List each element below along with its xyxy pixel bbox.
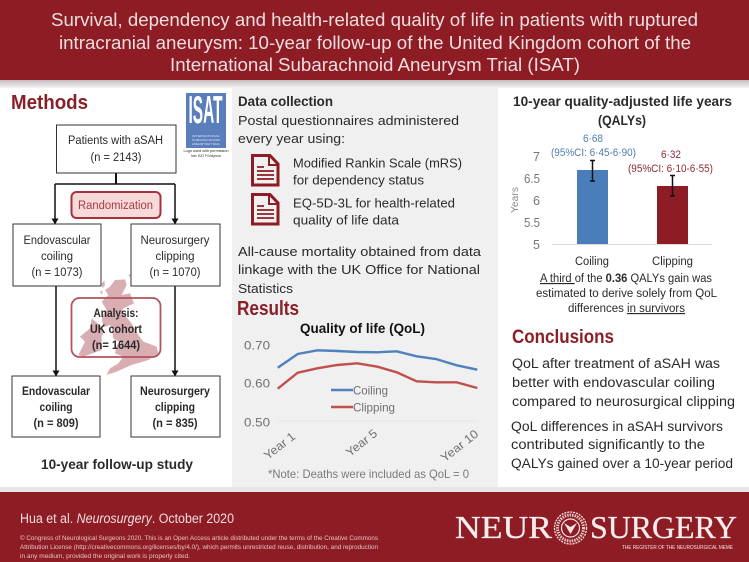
- y axis: 5.5: [524, 216, 540, 230]
- copyright: Attribution License (http://creativecommons.org/licenses/by/4.0/), which permits unrestricted reuse, distribution, and reproduction: [20, 544, 378, 551]
- title: [51, 10, 698, 75]
- arrows: flow lines: [55, 173, 175, 376]
- y axis: Years: [509, 187, 521, 213]
- heading: results: Results: [237, 298, 299, 320]
- icon: ISAT logo: ANEURYSM TRIAL: [192, 142, 220, 146]
- y axis: 7: [533, 150, 540, 164]
- icon: UK map: [78, 274, 158, 375]
- panel: middle grey background: [232, 87, 498, 487]
- x axis labels: [261, 426, 481, 465]
- text: modified Rankin scale: for dependency status: [293, 172, 424, 188]
- bar: clipping: [657, 186, 688, 244]
- line: coiling: [278, 350, 477, 370]
- value: coiling: [551, 133, 636, 159]
- box: neurosurgery clipping: [131, 224, 220, 286]
- y axis: [509, 150, 540, 252]
- value: coiling: (95%CI: 6·45-6·90): [551, 147, 636, 159]
- text: QALY gain: A third of the 0.36 QALYs gain was: [540, 273, 712, 285]
- y axis: 5: [533, 238, 540, 252]
- text: EQ-5D-3L: [293, 196, 455, 228]
- x axis labels: Year 1: [261, 429, 298, 462]
- text: QALY gain: differences in survivors: [568, 303, 685, 315]
- heading: QALYs: (QALYs): [598, 113, 646, 128]
- text: QALY gain: estimated to derive solely from QoL: [536, 288, 718, 300]
- logo: Neurosurgery: THE REGISTER OF THE NEUROSURGICAL MEME: [622, 545, 733, 551]
- box: analysis UK cohort: [72, 298, 160, 357]
- text: QALY gain: [536, 273, 718, 315]
- box: analysis UK cohort: UK cohort: [90, 322, 142, 336]
- value: coiling: 6·68: [583, 133, 603, 145]
- text: modified Rankin scale: [293, 156, 462, 188]
- box: neurosurgery clipping result: Neurosurgery: [140, 384, 210, 398]
- copyright: © Congress of Neurological Surgeons 2020. This is an Open Access article distributed under the terms of the Creative Commons: [20, 534, 379, 542]
- box: endovascular coiling result: [12, 376, 100, 437]
- box: endovascular coiling: coiling: [41, 249, 73, 263]
- copyright: in any medium, provided the original work is properly cited.: [20, 553, 190, 560]
- y axis labels: 0.50: [244, 416, 270, 430]
- icon: document: [252, 194, 278, 224]
- note: *Note: Deaths were included as QoL = 0: [268, 467, 469, 481]
- logo: Neurosurgery: SURGERY: [590, 509, 737, 545]
- line: clipping: [278, 363, 477, 389]
- icon: document: [252, 156, 278, 185]
- panel: methods: [11, 89, 228, 472]
- box: endovascular coiling result: (n = 809): [34, 416, 78, 430]
- copyright: [20, 534, 379, 560]
- text: postal questionnaires: every year using:: [238, 131, 345, 146]
- icon: emblem: [554, 512, 586, 544]
- y axis labels: 0.60: [244, 376, 270, 390]
- value: clipping: (95%CI: 6·10-6·55): [628, 163, 713, 175]
- box: neurosurgery clipping: (n = 1070): [150, 265, 200, 279]
- value: clipping: 6·32: [661, 149, 681, 161]
- text: conclusion 1: QoL after treatment of aSAH was: [512, 356, 720, 371]
- legend: Clipping: [353, 400, 395, 414]
- heading: methods: Methods: [11, 92, 88, 114]
- box: analysis UK cohort: Analysis:: [94, 306, 138, 320]
- heading: data collection: Data collection: [238, 94, 333, 109]
- icon: ISAT logo: from ISAT PI Molyneux: [191, 154, 221, 158]
- box: neurosurgery clipping result: clipping: [155, 400, 195, 414]
- heading: QALYs: 10-year quality-adjusted life years: [513, 94, 732, 109]
- x axis labels: Year 5: [343, 426, 380, 459]
- text: postal questionnaires: Postal questionnaires administered: [238, 113, 459, 128]
- box: neurosurgery clipping result: (n = 835): [152, 416, 198, 430]
- text: postal questionnaires: [238, 113, 459, 146]
- text: conclusion 2: contributed significantly to the: [511, 437, 705, 452]
- x axis labels: [575, 256, 693, 268]
- icon: ISAT logo: SUBARACHNOID: [192, 138, 221, 142]
- title: International Subarachnoid Aneurysm Trial (ISAT): [170, 55, 580, 75]
- icon: ISAT logo: INTERNATIONAL: [192, 134, 220, 138]
- text: all-cause mortality: [238, 244, 482, 296]
- header banner: [0, 0, 749, 80]
- y axis labels: 0.70: [244, 338, 270, 352]
- heading: QALYs: [513, 94, 732, 128]
- text: modified Rankin scale: Modified Rankin Scale (mRS): [293, 156, 462, 170]
- text: conclusion 2: QALYs gained over a 10-year period: [511, 456, 733, 471]
- box: patients with aSAH: (n = 2143): [90, 150, 142, 164]
- panel: data collection: [238, 94, 482, 296]
- icon: ISAT logo: [184, 89, 228, 158]
- x axis labels: Clipping: [652, 256, 693, 268]
- y axis: 6: [533, 194, 540, 208]
- text: conclusion 2: QoL differences in aSAH survivors: [511, 419, 723, 434]
- panel: QALYs: [509, 94, 732, 315]
- title: Survival, dependency and health-related quality of life in patients with ruptured: [51, 10, 698, 30]
- panel: results: [237, 298, 481, 481]
- bar: coiling: [577, 170, 608, 244]
- box: neurosurgery clipping: Neurosurgery: [140, 233, 210, 247]
- box: endovascular coiling: (n = 1073): [32, 265, 82, 279]
- text: conclusion 1: compared to neurosurgical clipping: [512, 394, 735, 409]
- heading: conclusions: Conclusions: [512, 327, 614, 348]
- bar chart: QALYs: [509, 133, 713, 268]
- y axis: 6.5: [524, 172, 540, 186]
- error bars: [590, 160, 675, 196]
- text: EQ-5D-3L: quality of life data: [293, 212, 400, 228]
- box: analysis UK cohort: (n= 1644): [92, 338, 140, 352]
- text: conclusion 2: [511, 419, 733, 471]
- x axis labels: Year 10: [438, 427, 481, 465]
- box: patients with aSAH: Patients with aSAH: [68, 133, 163, 147]
- legend: Coiling: [353, 384, 388, 398]
- icon: ISAT logo: Logo used with permission: [184, 149, 228, 153]
- text: EQ-5D-3L: EQ-5D-3L for health-related: [293, 196, 455, 210]
- line chart: quality of life: [244, 321, 481, 465]
- box: endovascular coiling result: Endovascular: [22, 384, 90, 398]
- chart title: Quality of life (QoL): [300, 321, 425, 336]
- text: all-cause mortality: All-cause mortality obtained from data: [238, 244, 482, 259]
- panel: conclusions: [511, 327, 735, 471]
- text: all-cause mortality: Statistics: [238, 281, 293, 296]
- box: endovascular coiling result: coiling: [40, 400, 72, 414]
- box: neurosurgery clipping result: [131, 376, 220, 437]
- text: conclusion 1: [512, 356, 735, 409]
- logo: Neurosurgery: NEUR: [455, 509, 553, 545]
- x axis labels: Coiling: [575, 256, 609, 268]
- footer banner: [0, 492, 749, 562]
- citation: Hua et al. Neurosurgery. October 2020: [20, 511, 234, 526]
- box: neurosurgery clipping: clipping: [156, 249, 195, 263]
- y axis labels: [244, 338, 270, 430]
- text: conclusion 1: better with endovascular coiling: [512, 375, 715, 390]
- text: follow-up study: 10-year follow-up study: [41, 457, 193, 472]
- logo: Neurosurgery: [455, 509, 737, 551]
- title: intracranial aneurysm: 10-year follow-up of the United Kingdom cohort of the: [59, 33, 691, 53]
- text: ISAT: [188, 89, 223, 132]
- box: randomization: Randomization: [78, 198, 153, 212]
- box: endovascular coiling: Endovascular: [24, 233, 90, 247]
- box: patients with aSAH: [56, 125, 176, 173]
- legend: [331, 384, 395, 414]
- box: endovascular coiling: [13, 224, 101, 286]
- text: all-cause mortality: linkage with the UK Office for National: [238, 262, 480, 277]
- value: clipping: [628, 149, 713, 175]
- box: randomization: [72, 192, 160, 218]
